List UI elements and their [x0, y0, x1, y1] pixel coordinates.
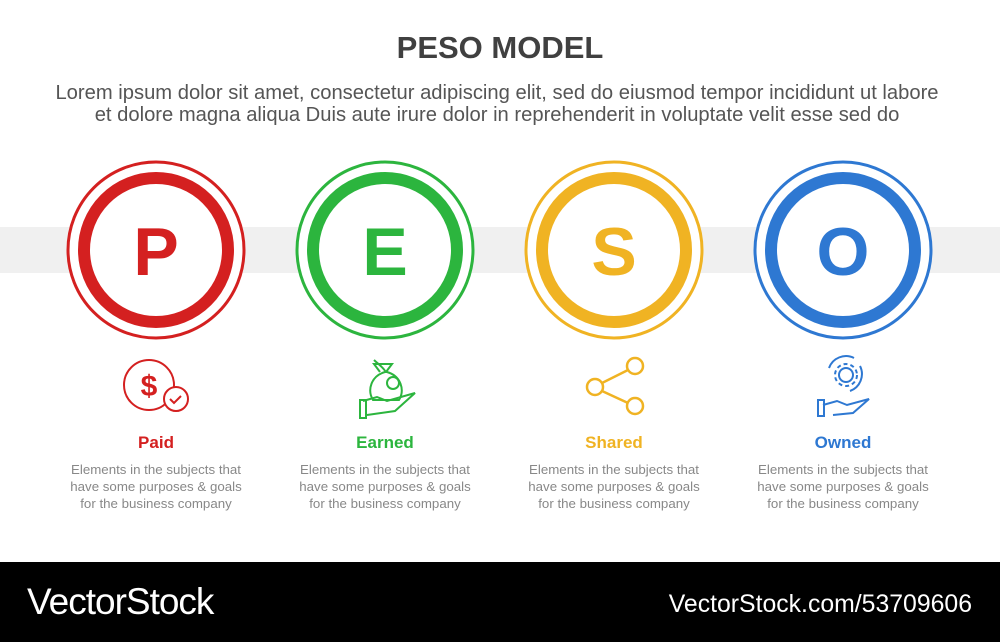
- circle: E: E: [362, 214, 408, 290]
- icon: shared: [587, 358, 643, 414]
- footer bar: VectorStock: [27, 581, 215, 622]
- icon: owned: [818, 356, 869, 416]
- descriptions: have some purposes & goals: [757, 479, 929, 494]
- labels: Owned: [815, 433, 871, 452]
- circle: O: [755, 162, 931, 338]
- descriptions: Elements in the subjects that: [758, 462, 928, 477]
- circle: P: [68, 162, 244, 338]
- descriptions: Elements in the subjects that: [300, 462, 470, 477]
- icon: earned: [360, 360, 415, 418]
- circle: P: P: [133, 214, 179, 290]
- descriptions: Elements in the subjects that: [71, 462, 241, 477]
- subtitle text: et dolore magna aliqua Duis aute irure dolor in reprehenderit in voluptate velit esse sed do: [95, 104, 899, 126]
- subtitle text: [55, 82, 939, 126]
- footer bar: VectorStock.com/53709606: [669, 591, 972, 618]
- title: PESO MODEL: [397, 30, 603, 65]
- descriptions: have some purposes & goals: [528, 479, 700, 494]
- labels: [138, 433, 871, 452]
- subtitle text: Lorem ipsum dolor sit amet, consectetur adipiscing elit, sed do eiusmod tempor incididunt ut labore: [55, 82, 939, 104]
- circle: E: [297, 162, 473, 338]
- descriptions: [70, 462, 929, 511]
- background band: [0, 227, 1000, 273]
- descriptions: Elements in the subjects that: [529, 462, 699, 477]
- descriptions: for the business company: [767, 496, 919, 511]
- descriptions: have some purposes & goals: [299, 479, 471, 494]
- circle: O: O: [817, 214, 869, 290]
- circle: S: S: [591, 214, 637, 290]
- labels: Shared: [585, 433, 643, 452]
- descriptions: for the business company: [309, 496, 461, 511]
- labels: Paid: [138, 433, 174, 452]
- icon: paid: $: [141, 370, 158, 403]
- descriptions: have some purposes & goals: [70, 479, 242, 494]
- icon: paid: [124, 360, 188, 411]
- labels: Earned: [356, 433, 414, 452]
- descriptions: for the business company: [80, 496, 232, 511]
- circle: S: [526, 162, 702, 338]
- descriptions: for the business company: [538, 496, 690, 511]
- footer bar: [0, 562, 1000, 642]
